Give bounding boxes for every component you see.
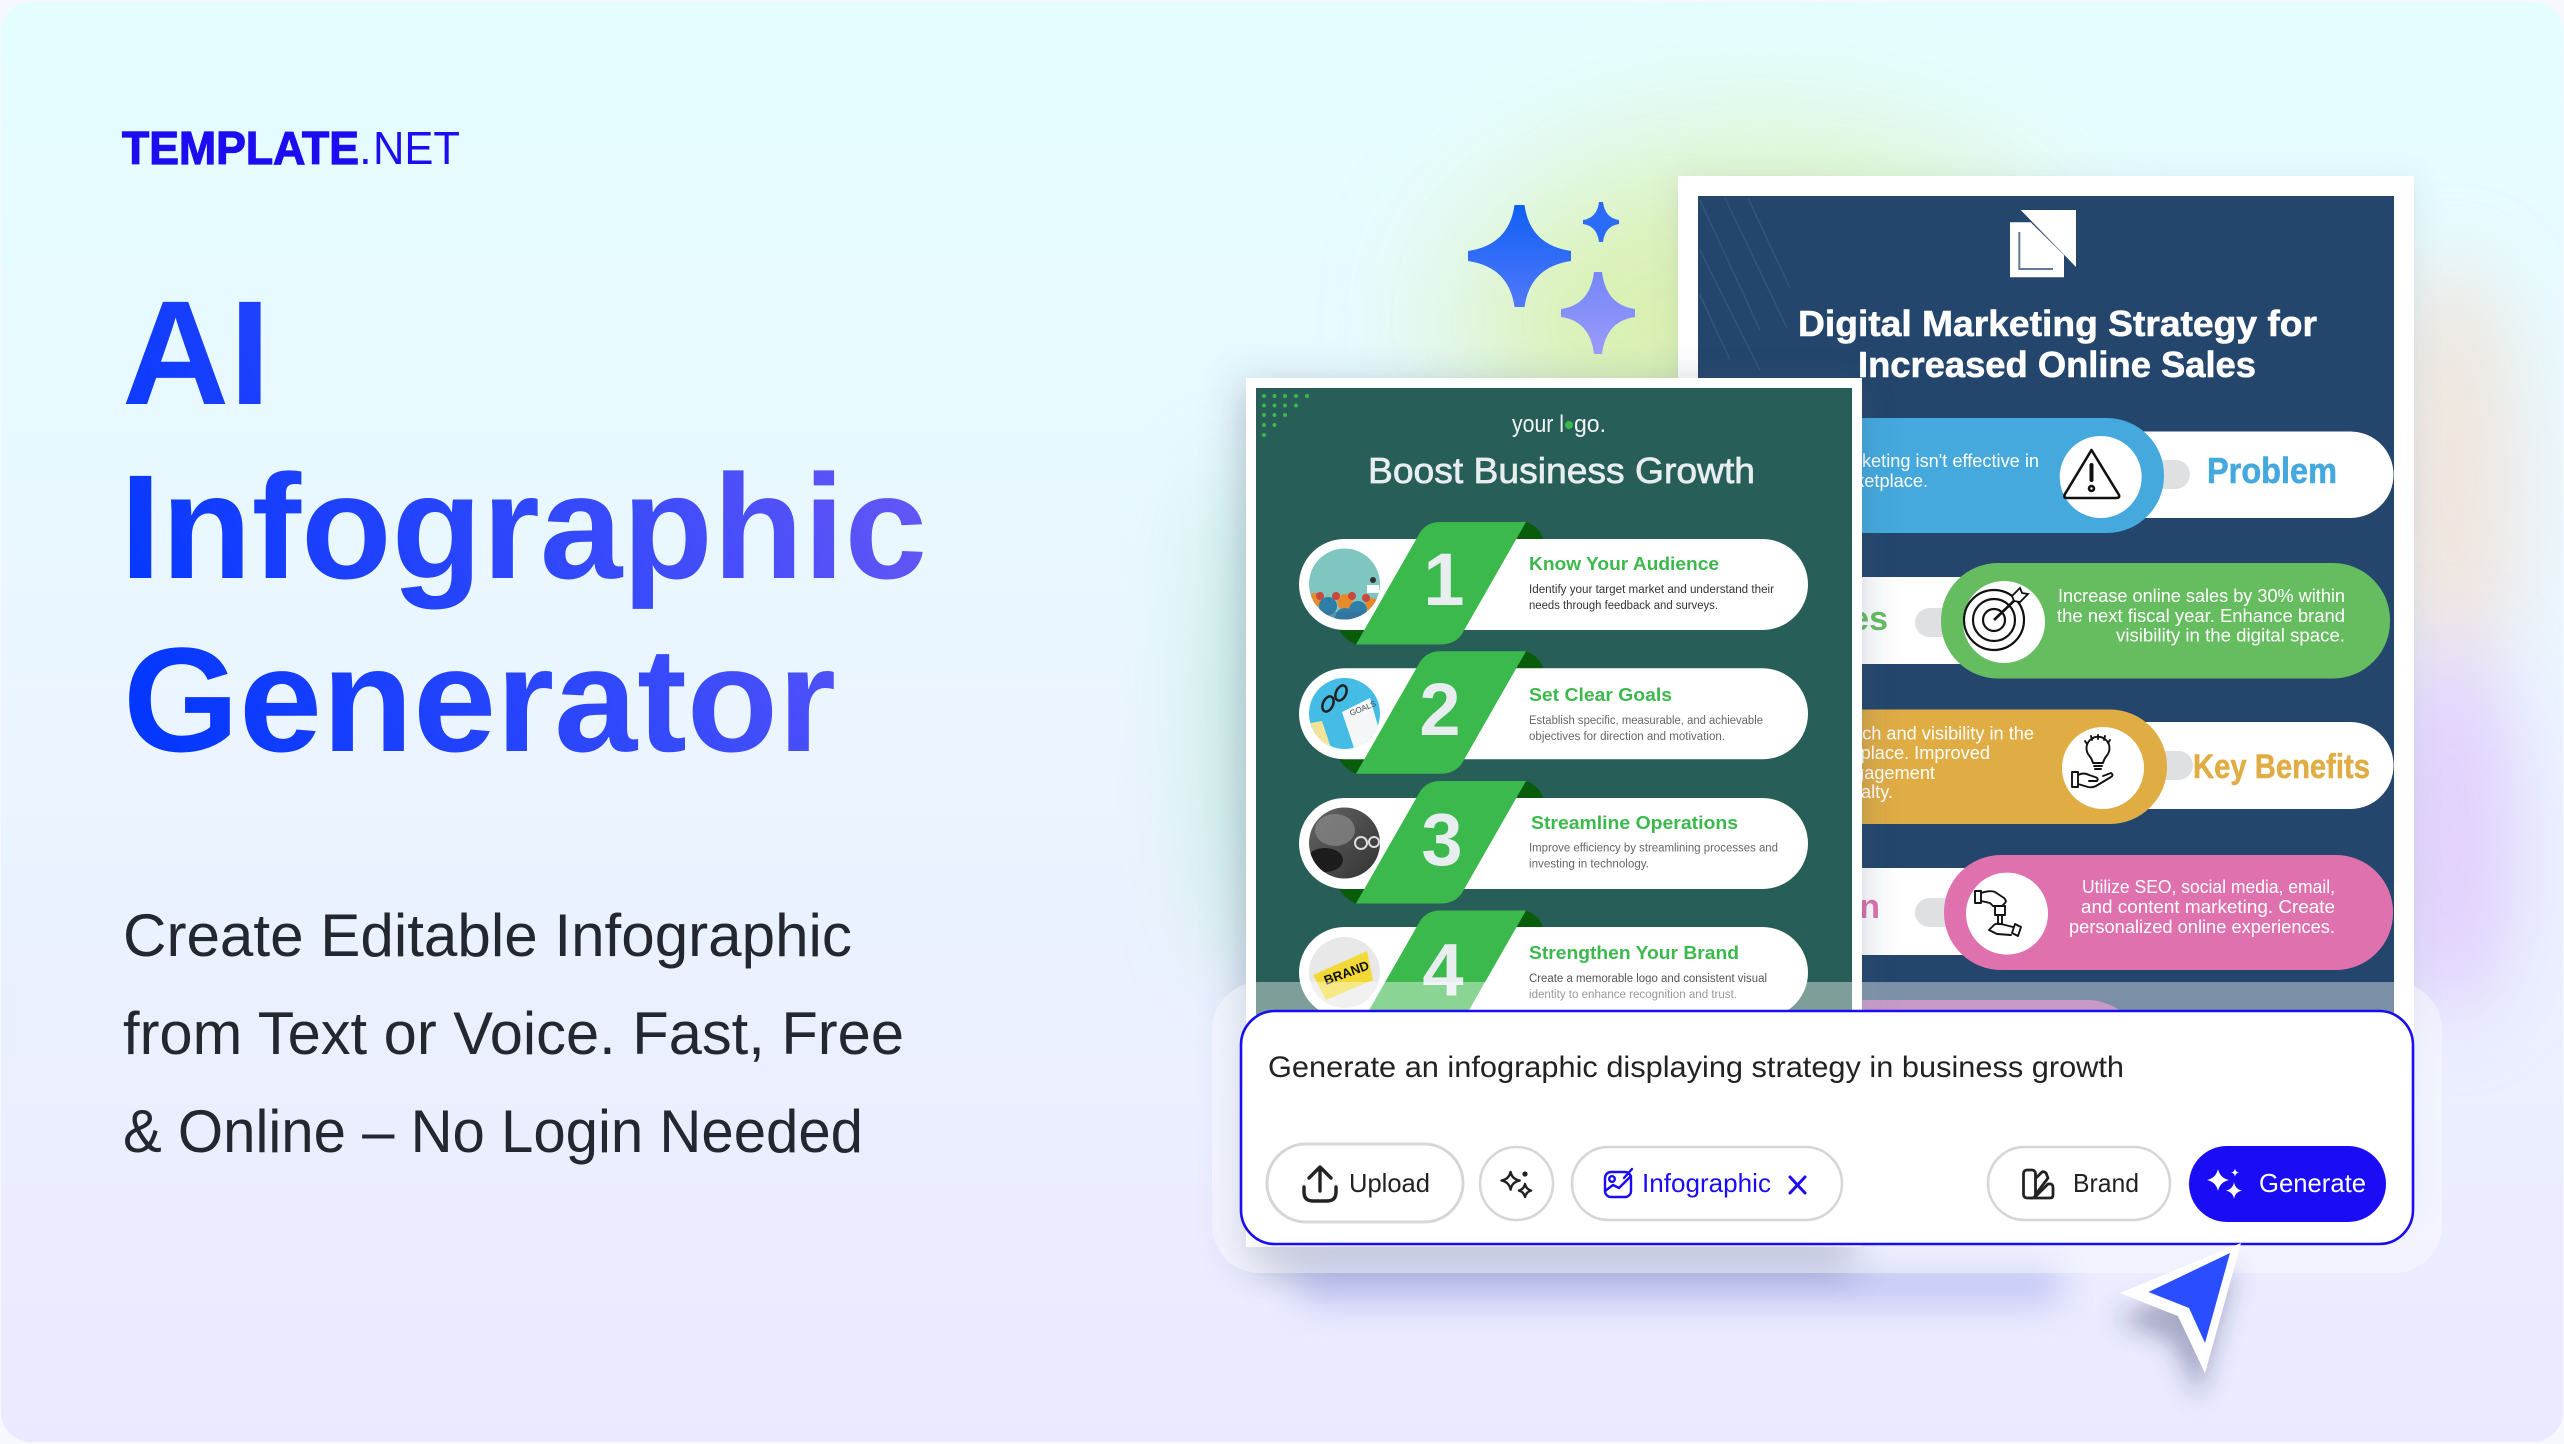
row: key benefits: marketplace. Improved: [1805, 743, 1990, 763]
card heading: [1800, 309, 2317, 378]
button: upload: [1267, 1144, 1463, 1222]
title: Generator: [123, 618, 836, 783]
your logo wordmark: your l: [1512, 411, 1564, 438]
button: generate: [2189, 1146, 2386, 1222]
icon: card logo: [2010, 210, 2076, 277]
row: objectives: Objectives: [1716, 600, 1888, 638]
card heading: Digital Marketing Strategy for: [1798, 303, 2317, 344]
row: key benefits: Increased reach and visibility in the: [1751, 724, 2034, 744]
title: [120, 271, 927, 783]
step 3: investing in technology.: [1529, 858, 1649, 870]
step 3: 3: [1421, 798, 1463, 881]
row: execution: and content marketing. Create: [2081, 897, 2335, 917]
row: execution: [1862, 855, 2393, 970]
row: execution: Execution: [1718, 888, 1880, 926]
brand logo: TEMPLATE: [122, 122, 359, 174]
step 1: 1: [1423, 538, 1465, 621]
icon: lightbulb on hand: [2072, 735, 2112, 787]
photo: brand card: BRAND: [1322, 958, 1371, 988]
button: magic: [1480, 1147, 1553, 1220]
step 4: Create a memorable logo and consistent visual: [1529, 973, 1767, 985]
step 3: Improve efficiency by streamlining processes and: [1529, 843, 1778, 855]
photo: goals desk: GOALS: [1348, 699, 1377, 718]
button: brand: [1988, 1147, 2170, 1220]
your logo wordmark: go.: [1574, 411, 1606, 438]
step 4: identity to enhance recognition and trust.: [1529, 989, 1737, 1001]
step 4: Strengthen Your Brand: [1529, 942, 1739, 963]
row: objectives: Increase online sales by 30% within: [2058, 586, 2345, 606]
button: infographic tag: [1572, 1147, 1842, 1220]
icon: target with arrow: [1964, 588, 2028, 650]
subtitle text block: Create Editable Infographic: [123, 902, 852, 969]
cursor arrow: [2120, 1243, 2241, 1373]
translucent prompt panel: [1212, 982, 2442, 1273]
button: upload: Upload: [1349, 1168, 1430, 1198]
prompt input box: [1241, 1011, 2413, 1244]
row: key benefits: [1862, 710, 2394, 824]
row: key benefits: customer engagement: [1754, 763, 1935, 783]
row: execution: Utilize SEO, social media, email,: [2082, 877, 2335, 897]
row: key benefits: Key Benefits: [2193, 748, 2370, 786]
title: Infographic: [120, 445, 927, 610]
row: objectives: visibility in the digital space.: [2116, 626, 2345, 646]
subtitle text block: from Text or Voice. Fast, Free: [123, 1000, 904, 1067]
row: key benefits: and loyalty.: [1802, 782, 1893, 802]
step 2: [1299, 651, 1808, 774]
step 1: needs through feedback and surveys.: [1529, 600, 1718, 612]
step 2: objectives for direction and motivation.: [1529, 731, 1725, 743]
photo: brand card: [1300, 930, 1390, 1020]
subtitle text block: & Online – No Login Needed: [123, 1098, 863, 1165]
your logo wordmark: [1512, 414, 1604, 437]
photo: gears: [1300, 800, 1390, 890]
step 1: Identify your target market and understand their: [1529, 584, 1774, 596]
card heading: Boost Business Growth: [1368, 450, 1755, 491]
row: problem: Problem: [2207, 450, 2337, 491]
prompt text: Generate an infographic displaying strategy in business growth: [1268, 1051, 2124, 1084]
step 4: 4: [1422, 928, 1464, 1012]
step 1: [1299, 522, 1808, 644]
row: objectives: the next fiscal year. Enhance brand: [2057, 606, 2345, 626]
icon: hands with nozzle: [1975, 891, 2021, 936]
step 3: [1299, 781, 1808, 904]
photo: audience: [1300, 540, 1390, 632]
button: brand: Brand: [2073, 1168, 2139, 1198]
row: objectives: [1862, 563, 2390, 678]
step 2: 2: [1419, 668, 1461, 751]
panel: digital marketing infographic card: [1674, 176, 2418, 1038]
decorative dot grid: [1262, 394, 1309, 437]
step 4: [1299, 910, 1808, 1033]
row: partially hidden purple pill: [1862, 1000, 2119, 1010]
subtitle text block: [123, 902, 904, 1165]
brand logo: .: [359, 122, 372, 174]
row: execution: personalized online experiences.: [2069, 917, 2335, 937]
step 2: Set Clear Goals: [1529, 684, 1672, 705]
panel shadows: [1260, 1240, 2060, 1304]
title: AI: [122, 271, 270, 436]
photo: goals desk: [1300, 670, 1390, 760]
row: problem: today's marketplace.: [1762, 471, 1928, 491]
row: problem: Traditional marketing isn't effective in: [1741, 451, 2039, 471]
button: infographic tag: Infographic: [1642, 1168, 1771, 1198]
step 2: Establish specific, measurable, and achievable: [1529, 715, 1763, 727]
button: generate: Generate: [2259, 1168, 2366, 1198]
icon: warning triangle: [2064, 450, 2119, 498]
card heading: Increased Online Sales: [1858, 344, 2256, 385]
panel: boost business growth infographic card: [1246, 378, 1862, 1247]
step 1: Know Your Audience: [1529, 553, 1719, 574]
icon: sparkles: [1468, 202, 1635, 354]
brand logo: NET: [373, 122, 460, 174]
row: problem: [1862, 418, 2394, 533]
step 3: Streamline Operations: [1531, 812, 1738, 833]
